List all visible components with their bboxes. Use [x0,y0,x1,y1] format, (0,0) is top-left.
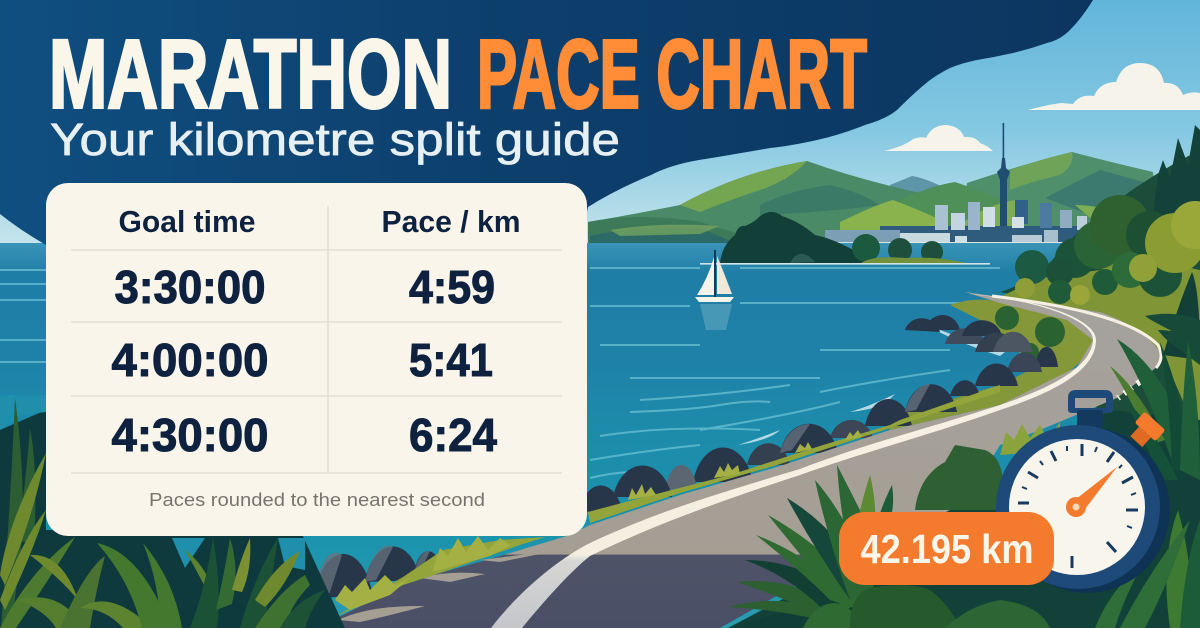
title: MARATHON [49,20,452,128]
goal time values: 4:00:00 [112,334,268,386]
foliage: right flax blades [1095,272,1200,628]
pace values: 6:24 [409,409,497,461]
island [700,212,990,265]
road edge lines [491,294,1161,628]
sea [0,243,1200,628]
hillside with trees [1000,125,1200,460]
shore foam [738,322,1005,445]
sailboat [695,250,734,330]
sky [0,0,1200,260]
foliage: centre agave and bushes [728,410,1200,628]
water ripples [0,268,1000,478]
header background shape [0,0,1093,245]
bend grass [880,300,1093,430]
city skyline [825,200,1090,244]
panel: pace table [46,183,587,536]
foliage: bottom left flax [0,395,345,628]
title: PACE CHART [477,20,867,128]
road [320,292,1162,628]
cloud: large right [1028,63,1200,110]
mountains [588,152,1160,244]
icon: stopwatch [996,390,1170,593]
column headings: Pace / km [382,204,520,239]
bend bushes [995,306,1065,361]
landmark tower [997,123,1010,226]
title [49,20,867,128]
goal time values: 4:30:00 [112,409,268,461]
goal time values: 3:30:00 [114,261,266,313]
verge grass [333,385,1000,618]
footnote: Paces rounded to the nearest second [149,490,485,510]
shoreline rocks [313,315,1058,600]
column headings: Goal time [118,204,256,239]
rock highlights [313,384,930,600]
table rules [71,206,562,473]
distance badge [839,512,1054,585]
pace values: 4:59 [409,261,495,313]
distance badge: 42.195 km [860,526,1034,572]
cloud: small centre [884,125,993,151]
grass tufts [335,430,862,610]
goal time values [112,261,268,461]
pace values [409,261,497,461]
road sand patches [338,550,560,622]
subtitle: Your kilometre split guide [50,114,620,165]
pace values: 5:41 [409,334,493,386]
column headings [118,204,520,239]
